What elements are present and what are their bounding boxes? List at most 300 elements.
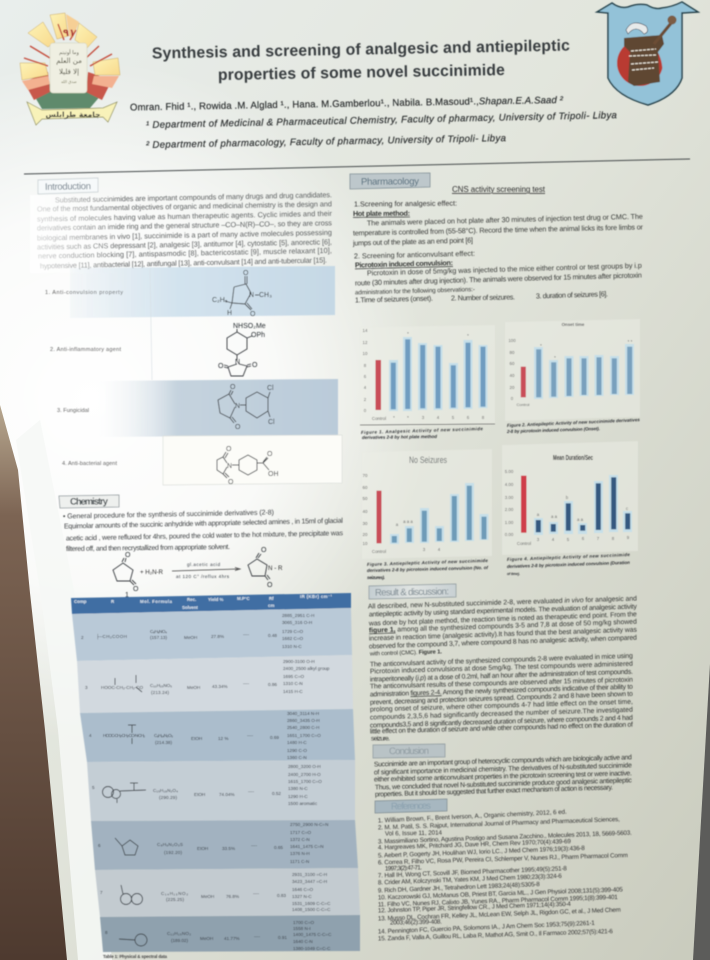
table row: compound 6: 33.5%	[222, 846, 235, 851]
table row: compound 7	[95, 868, 360, 917]
icon: molecule 4	[217, 446, 278, 486]
chart: figure 4 mean seizure duration	[502, 441, 638, 576]
reaction scheme: 1	[125, 592, 129, 599]
chart: figure 2 anti-epileptic onset: 20	[510, 385, 515, 390]
table row: compound 2: 2885_2951 C-H	[282, 613, 314, 618]
table row: compound 5: EtOH	[194, 792, 205, 797]
reaction scheme	[113, 547, 283, 599]
table row: compound 5: 2800_3200 O-H	[288, 764, 321, 769]
table row: compound 4: 2860_3435 O-H	[287, 718, 320, 723]
text: screening methods: temperature is controlled from (55-58°C). Record the time when the animal licks its fore limbs or	[353, 222, 644, 237]
chart: figure 3 number of seizures: a a a	[403, 519, 413, 524]
table header: Rf	[269, 596, 274, 601]
text: reference list: 14. Pennington FC, Guercio PA, Solomons IA., J Am Chem Soc 1953;75(9):2261-1	[378, 920, 595, 935]
chart: figure 4 mean seizure duration: 3	[537, 537, 540, 542]
text: general procedure: • General procedure for the synthesis of succinimide derivatives (2-8)	[63, 509, 274, 520]
icon: molecule 3: Cl	[267, 385, 274, 392]
table row: compound 8: 1400_1475 C-C=C	[293, 932, 332, 937]
text: screening methods: Picrotoxin induced convulsion:	[355, 258, 453, 269]
icon: molecule 1: O	[250, 311, 256, 318]
table row: compound 8	[100, 915, 360, 952]
table row: compound 5: ----	[248, 789, 255, 794]
table header: Solvent	[182, 605, 198, 610]
text: results paragraphs: antiepileptic activity by using standard experimental models. The evaluation of analgesic activity	[369, 604, 638, 618]
text: reference list: 1997;3(2):47-71.	[385, 864, 422, 872]
heading: conclusion	[373, 744, 445, 758]
panel: results and discussion	[368, 584, 638, 742]
text: reference list: 2003;46(2):399-408.	[390, 919, 442, 926]
table row: compound 6: 1376 N-H	[290, 851, 310, 856]
icon: molecule 2: O	[252, 362, 258, 369]
text: screening methods: 2. Screening for anticonvulsant effect:	[354, 249, 475, 260]
chart: figure 2 anti-epileptic onset: 0	[511, 396, 514, 401]
text: results paragraphs: figure 1, among all the synthesized compounds 3-5 and 7,8 at dose of 50 mg/kg showed	[369, 619, 637, 634]
text: results paragraphs: observed for the compound 3,7, where compound 8 has no analgesic activity, when compared	[369, 635, 637, 650]
title: properties of some novel succinimide	[218, 62, 505, 84]
table row: compound 7: 2931_3100 =C-H	[292, 872, 327, 877]
table row: compound 2: ----	[243, 632, 250, 637]
chart: figure 2 anti-epileptic onset: * *	[628, 339, 633, 344]
table row: compound 4: 0.69	[270, 735, 279, 740]
chart: figure 3 number of seizures: 4	[438, 547, 441, 552]
table row: anti-inflammatory agent: 2. Anti-inflammatory agent	[50, 347, 121, 353]
icon: molecule 1: O	[243, 270, 249, 277]
text: results paragraphs: with control (CMC). Figure 1.	[369, 649, 442, 658]
heading: results and discussion	[369, 584, 456, 599]
icon: molecule 4: O	[267, 451, 273, 458]
table header: R	[111, 599, 115, 604]
chart: figure 3 number of seizures: 50	[363, 496, 368, 501]
table row: anti-inflammatory agent	[50, 268, 266, 380]
text: screening methods: administration for the following observations:-	[355, 286, 475, 296]
text: results paragraphs: increase in reaction time (analgesic activity).It has found that the best analgesic activity was	[369, 627, 638, 642]
table row: compound 7: 1531_1609 C-C=C	[292, 901, 331, 906]
caption: figure 4: of time).	[507, 572, 520, 576]
icon: molecule 3: O	[235, 424, 241, 431]
icon: molecule 2: OPh	[251, 332, 265, 339]
table row: compound 3	[77, 655, 353, 713]
chart: figure 4 mean seizure duration: 8	[612, 536, 615, 541]
affiliations: ² Department of pharmacology, Faculty of pharmacy, University of Tripoli- Libya	[146, 133, 506, 151]
chart: figure 2 anti-epileptic onset: Control	[517, 402, 530, 407]
reaction scheme: gl.acetic acid	[187, 562, 220, 567]
heading: chemistry	[59, 495, 119, 508]
chart: figure 3 number of seizures: 60	[363, 485, 368, 490]
table row: compound 3: (213.24)	[151, 690, 169, 695]
text: reference list: 3. Massimiliano Sortino, Agustina Postigo and Susana Zacchino., Molecules 2013, 18, 5669-5603.	[378, 830, 632, 845]
reaction scheme: + H₂N-R	[140, 569, 164, 576]
table row: compound 5: 1380 N-C	[288, 786, 308, 791]
text: reference list: 10. Kaczorowski GJ, McManus OB, Priest BT, Garcia ML., J Gen Physiol 2008;131(5):399-405	[378, 886, 623, 901]
heading: introduction: Introduction	[45, 181, 91, 193]
text: results paragraphs: prevent, decreasing and protection seizures spread. Compounds 2 and 8 have been shown to	[370, 691, 633, 706]
table row: compound 6: 1641_1475 C=N	[290, 844, 324, 849]
chart: figure 3 number of seizures: No Seizures	[409, 455, 447, 466]
chart: figure 4 mean seizure duration: Mean Duration/Sec	[553, 455, 593, 462]
text: introduction paragraph	[37, 190, 333, 270]
icon: molecule 2: N	[235, 359, 240, 366]
chart: figure 4 mean seizure duration: 6	[582, 536, 585, 541]
table row: compound 5: 1500 aromatic	[288, 801, 318, 806]
text: reference list: 12. Johnston TP, Piper JR, Stringfellow CR., J Med Chem 1971;14(4):350-4	[378, 901, 571, 914]
chart: figure 4 mean seizure duration: 9	[627, 535, 630, 540]
text: screening methods: Picrotoxin in dose of 5mg/kg was injected to the mice either control or test groups by i.p	[367, 261, 642, 277]
table header: Comp	[74, 599, 87, 604]
table row: compound 8: 41.77%	[224, 936, 240, 941]
chart: figure 4 mean seizure duration: 4	[552, 537, 555, 542]
caption: figure 1	[361, 426, 483, 440]
chart: figure 1 analgesic activity: *	[393, 415, 395, 420]
caption: figure 3: seizures).	[367, 575, 385, 580]
authors: Omran. Fhid ¹., Rowida .M. Alglad ¹., Hana. M.Gamberlou¹., Nabila. B.Masoud¹.,Shapan.E.A.Saad ²	[130, 95, 564, 113]
table row: compound 6: EtOH	[197, 846, 208, 851]
chart: figure 4 mean seizure duration: 2.00	[505, 507, 514, 512]
table row: compound 5: 5	[92, 785, 95, 790]
icon: molecule 4: OH	[268, 471, 278, 478]
table row: compound 7: 7	[100, 890, 103, 895]
text: results paragraphs	[368, 596, 638, 742]
text: general procedure: filtered off, and then recrystallized from appropriate solvent.	[66, 544, 230, 553]
table row: compound 4: ----	[247, 733, 254, 738]
icon: molecule 4: O	[226, 446, 232, 453]
table row: compound 5: 2400_2700 H-O	[288, 772, 321, 777]
logo: University of Tripoli emblem: صدق الله	[61, 79, 77, 84]
icon: molecule 4: O	[228, 479, 234, 486]
text: results paragraphs: compounds3,5 and 8 significantly decreased duration of seizure, where compounds 2 and 4 had	[370, 715, 633, 729]
text: introduction paragraph: activities such as CNS depressant [2], analgesic [3], antitumor [4], cytostatic [5], anorectic [6],	[37, 237, 332, 251]
caption: figure 2: 2-8 by picrotoxin induced convulsion (Onset).	[506, 426, 600, 434]
logo: University of Tripoli emblem: جامعة طرابلس	[45, 110, 101, 119]
chart: figure 1 analgesic activity: 0	[364, 408, 367, 413]
logo: University of Tripoli emblem: وما أوتيتم	[59, 49, 79, 56]
table row: compound 6: 6	[98, 843, 101, 848]
table row: compound 8: 1380-1049 C=C-C	[293, 946, 331, 951]
text: results paragraphs: compounds 2,3,5,6 had significantly decreased the number of seizure.The investigated	[370, 707, 633, 721]
caption: figure 2	[506, 417, 640, 434]
text: screening methods: 2. Number of seizures.	[451, 292, 515, 302]
table row: compound 4: 4	[89, 733, 92, 738]
table row: compound 2: 2	[81, 635, 84, 640]
table row: compound 2: 0.48	[268, 633, 277, 638]
chart: figure 2 anti-epileptic onset: *	[540, 343, 542, 348]
arrow: reaction	[172, 568, 240, 571]
text: screening methods: route (30 minutes after drug injection). The animals were observed for 15 minutes after picrotoxin	[355, 270, 642, 287]
table row: compound 3: 1415 H-C	[283, 689, 303, 694]
text: screening methods: The animals were placed on hot plate after 30 minutes of injection test drug or CMC. The	[367, 212, 643, 227]
table row: compound 8: C₁₂H₁₅NO₂	[167, 931, 191, 936]
icon: molecule 3: O	[230, 384, 236, 391]
icon: molecule 3	[218, 384, 275, 431]
chart: figure 1 analgesic activity: Control	[372, 416, 386, 421]
table row: compound 3: ----	[243, 681, 250, 686]
reaction scheme: O	[267, 582, 273, 589]
table row: compound 7: C₁₄H₁₃NO₂	[161, 891, 188, 896]
chart: figure 4 mean seizure duration: c	[626, 506, 629, 511]
panel: introduction	[30, 178, 333, 273]
icon: molecule 1: CH₃	[259, 292, 272, 299]
table row: compound 8: 1558 N-I	[293, 926, 311, 931]
chart: figure 3 number of seizures	[362, 449, 492, 580]
caption: figure 2: Figure 2. Antiepileptic Activity of new succinimide derivatives	[507, 417, 640, 428]
chart: figure 1 analgesic activity: 8	[364, 363, 367, 368]
table row: compound 8: MeOH	[200, 936, 213, 941]
text: reference list: 15. Zanda F, Valla A, Guillou RL, Laba R, Mathot AG, Smit O., Il Farmaco 2002;57(5):421-6	[378, 928, 613, 942]
table row: compound 7: (225.25)	[166, 897, 184, 902]
table header: IR (KBr) cm⁻¹	[300, 594, 333, 599]
table header: cm	[268, 603, 274, 608]
chart: figure 4 mean seizure duration: a	[537, 512, 540, 517]
text: introduction paragraph: One of the most fundamental objectives of organic and medicinal chemistry is the design and	[37, 199, 332, 213]
chart: figure 2 anti-epileptic onset: *	[554, 355, 556, 360]
text: reference list: 4. Hargreaves MK, Pritchard JG, Dave HR, Chem Rev 1970;70(4):439-69	[378, 838, 572, 851]
text: results paragraphs: was done by hot plate method, the reaction time is noted as therapeutic end point. From the	[368, 611, 637, 628]
chart: figure 3 number of seizures: 10	[363, 541, 368, 546]
table row: compound 2: (157.13)	[150, 635, 167, 640]
chart: figure 1 analgesic activity: 8	[482, 415, 485, 420]
table row: compound 7: 1646 C=O	[292, 887, 313, 892]
table row: compound 3: 2900-3100 O-H	[283, 659, 315, 664]
text: general procedure	[63, 509, 343, 553]
table row: compound 4	[80, 709, 355, 762]
text: results paragraphs: Picrotoxin induced convulsions at dose 5mg/kg. The test compounds were administered	[370, 661, 633, 675]
table row: compound 3: 43.34%	[212, 684, 228, 689]
chart: figure 3 number of seizures: Control	[372, 549, 386, 554]
chart: figure 2 anti-epileptic onset: 100	[508, 338, 516, 343]
caption: figure 4	[507, 552, 630, 576]
text: results paragraphs: prolong onset of seizure, where other compounds 4-7 had little effect on the onset time,	[370, 699, 633, 713]
heading: pharmacology: Pharmacology	[361, 176, 419, 188]
text: introduction paragraph: hypotensive [11], antibacterial [12], antifungal [13], anti-convulsant [14] and anti-tubercular [15].	[40, 255, 327, 270]
table row: compound 4: 1290 C-O	[287, 748, 307, 753]
icon: molecule 1: H	[227, 310, 232, 317]
chart: figure 3 number of seizures: 20	[363, 532, 368, 537]
heading: results and discussion: Result & discussion:	[375, 586, 449, 599]
chart: figure 4 mean seizure duration: 1.00	[505, 520, 514, 525]
caption: figure 4: Figure 4. Antiepileptic Activity of new succinimide	[507, 552, 630, 562]
table row: compound 4: HOOC-CH₂-CH₂-CO-N-CH₂	[103, 733, 145, 738]
table row: compound 4: 1651_1700 C=O	[287, 733, 321, 738]
panel: pharmacology	[350, 173, 644, 304]
text: general procedure: Equimolar amounts of the succinic anhydride with appropriate selected amines , in 15ml of glacial	[64, 518, 343, 530]
table row: anti-convulsion property: 1. Anti-convulsion property	[45, 290, 123, 296]
icon: molecule 4: N	[227, 463, 232, 470]
table header: Yield %	[208, 597, 224, 602]
chart: figure 4 mean seizure duration: Control	[517, 541, 531, 546]
chart: figure 3 number of seizures: 3	[423, 547, 426, 552]
icon: molecule 1: C₂H₅	[212, 297, 228, 304]
table row: compound 6: ----	[251, 843, 258, 848]
reaction scheme: at 120 C° /reflux 4hrs	[176, 574, 230, 579]
text: reference list	[378, 809, 632, 942]
chart: figure 4 mean seizure duration: 7	[597, 536, 600, 541]
chart: figure 4 mean seizure duration: 5	[567, 537, 570, 542]
text: results paragraphs: administration figures 2-4. Among the newly synthesized compounds indicative of their ability to	[370, 684, 633, 698]
chart: figure 2 anti-epileptic onset: Onset time	[562, 322, 585, 327]
table row: compound 8: ----	[254, 934, 261, 939]
icon: molecule 2: O	[218, 363, 224, 370]
chart: figure 2 anti-epileptic onset: 60	[510, 361, 515, 366]
table row: compound 6: C₈H₉N₂O₃S	[157, 842, 183, 847]
table row: compound 2: ├–CH₂COOH	[96, 633, 127, 640]
heading: pharmacology	[350, 173, 430, 189]
table row: compound 6: (192.20)	[164, 850, 182, 855]
table row: compound 5: 1615_1700 C=O	[288, 779, 322, 784]
heading: introduction	[38, 178, 98, 194]
reaction scheme: O	[133, 586, 139, 593]
table row: compound 6: 1372 C-N	[290, 837, 310, 842]
text: reference list: 8. Crider AM, Kolczynski TM, Yates KM, J Med Chem 1980;23(3):324-6	[378, 873, 562, 886]
panel: conclusion	[373, 744, 633, 798]
heading: CNS activity screening test: CNS activity screening test	[452, 185, 546, 194]
heading: references	[375, 799, 447, 813]
chart: figure 3 number of seizures: 70	[363, 473, 368, 478]
caption: figure 4: derivatives 2-8 by picrotoxin induced convulsion (Duration	[507, 560, 630, 569]
table row: compound 3: 2400_2500 alkyl group	[283, 666, 330, 671]
caption: figure 1: derivatives 2-8 by hot plate method	[362, 434, 437, 440]
text: results paragraphs: All described, new N-substituted succinimide 2-8, were evaluated in vivo for analgesic and	[368, 596, 637, 610]
table row: compound 2: 1682 C=O	[282, 636, 303, 641]
table row: compound 6: 2750_2900 N-C=N	[290, 822, 328, 827]
caption: figure 3: Figure 3. Antiepileptic Activity of new succinimide	[367, 558, 488, 567]
chart: figure 1 analgesic activity: *	[407, 331, 409, 336]
text: results paragraphs: little effect on the duration of seizure and while other compounds had no effect on the duration of	[370, 722, 633, 735]
table header	[71, 593, 351, 614]
text: introduction paragraph: derivatives contain an imide ring and the general structure –CO–N(R)–CO–, so they are cross	[37, 218, 332, 232]
chart: figure 2 anti-epileptic onset: 40	[510, 373, 515, 378]
heading: conclusion: Conclusion	[389, 746, 429, 757]
text: screening methods: Hot plate method:	[353, 209, 410, 218]
table row: compound 7: MeOH	[201, 894, 214, 899]
table row: compound 2: 3065_316 O-H	[282, 620, 312, 625]
table row: compound 2: C₆H₉NO₄	[150, 629, 167, 634]
table row: compound 6: 1717 C=O	[290, 830, 311, 835]
text: conclusion paragraph	[374, 754, 633, 798]
icon: molecule 1: N	[249, 292, 254, 299]
table row: compound 8: 8	[105, 930, 108, 935]
text: reference list: 1. William Brown, F., Brent Iverson, A., Organic chemistry, 2012, 6 ed.	[378, 809, 567, 824]
affiliations: ¹ Department of Medicinal & Pharmaceutical Chemistry, Faculty of pharmacy, University of Tripoli- Libya	[146, 110, 617, 131]
table row: anti-bacterial agent: 4. Anti-bacterial agent	[62, 461, 117, 467]
table row: compound 8: 1640 C-N	[293, 939, 313, 944]
reaction scheme: O	[125, 552, 131, 559]
text: introduction paragraph: nerve conduction blocking [7], antispasmodic [8], bactericostatic [9], muscle relaxant [10],	[38, 246, 332, 260]
chart: figure 1 analgesic activity: *	[407, 415, 409, 420]
text: results paragraphs: The anticonvulsant activity of the synthesized compounds 2-8 were evaluated in mice using	[370, 653, 633, 668]
chart: figure 3 number of seizures: 30	[363, 521, 368, 526]
table row: compound 3: 1695 C=O	[283, 674, 304, 679]
table row: compound 5: 0.52	[272, 791, 281, 796]
caption: figure 3	[367, 558, 488, 580]
text: reference list: Vol 6, Issue 11, 2014	[385, 829, 443, 837]
caption: figure 1: Figure 1. Analgesic Activity of new succinimide	[361, 426, 483, 435]
icon: molecule 3: N	[235, 403, 240, 410]
chart: figure 3 number of seizures: 40	[363, 509, 368, 514]
table row: compound 6: 1171 C-N	[290, 859, 309, 864]
table row: compound 3: 3	[85, 685, 88, 690]
reaction scheme: O	[261, 547, 267, 554]
title	[152, 37, 570, 84]
icon: molecule 2: NHSO₂Me	[233, 323, 266, 330]
text: screening methods: 1.Screening for analgesic effect:	[354, 199, 457, 208]
table row: compound 7: 1327 N-C	[292, 894, 312, 899]
table row: compound 5: 1290 H-C	[288, 794, 308, 799]
table row: fungicidal: 3. Fungicidal	[57, 408, 89, 414]
reaction scheme: N - R	[268, 565, 283, 572]
table header: M.P°C	[237, 596, 251, 601]
table: compound properties	[71, 593, 360, 959]
table note: Table 1: Physical & spectral data	[103, 954, 168, 959]
table row: compound 4: 2540_2800 C-H	[287, 725, 319, 730]
table row: compound 3: HOOC-CH₂-CH₂-CO	[101, 685, 144, 690]
heading: chemistry: Chemistry	[70, 496, 109, 508]
chart: figure 1 analgesic activity: 14	[363, 328, 368, 333]
text: screening methods: 3. duration of seizures [6].	[536, 289, 608, 300]
table row: compound 7: 76.8%	[226, 894, 239, 899]
table row: compound 5	[87, 760, 355, 821]
table row: compound 7: 1408_1500 C-C=C	[292, 907, 331, 912]
text: conclusion paragraph: either exhibited some anticonvulsant properties in the picrotoxin screening test or were inactive.	[374, 770, 632, 783]
chart: figure 1 analgesic activity	[360, 325, 495, 440]
text: conclusion paragraph: of significant importance in medicinal chemistry. The derivatives of N-substituted succinimide	[374, 762, 632, 776]
table row: compound 8: (189.02)	[171, 938, 188, 943]
table row: anti-bacterial agent	[62, 435, 342, 486]
text: results paragraphs: seizure.	[371, 736, 390, 742]
table row: compound 4: C₉H₁₄N₂O₃	[154, 733, 173, 738]
chart: figure 4 mean seizure duration: 0.00	[505, 532, 514, 537]
chart: figure 1 analgesic activity: 6	[364, 374, 367, 379]
chart: figure 1 analgesic activity: 6	[467, 415, 470, 420]
panel: references	[375, 799, 632, 942]
logo: University of Tripoli emblem: ٩١	[63, 28, 75, 39]
text: introduction paragraph: Substituted succinimides are important compounds of many drugs and drug candidates.	[55, 190, 332, 204]
affiliations	[146, 110, 617, 151]
chart: figure 4 mean seizure duration: b	[566, 495, 569, 500]
text: general procedure: acetic acid , were refluxed for 4hrs, poured the cold water to the hot mixture, the precipitate was	[66, 530, 343, 542]
table row: compound 8: 0.91	[278, 935, 287, 940]
chart: figure 2 anti-epileptic onset: 80	[510, 350, 515, 355]
text: screening methods: jumps out of the plate as an end point [6]	[352, 236, 473, 248]
chart: figure 2 anti-epileptic onset	[505, 319, 640, 434]
caption: figure 3: derivatives 2-8 by picrotoxin induced convulsion (No. of	[367, 565, 488, 573]
table row: compound 4: EtOH	[191, 736, 202, 741]
chart: figure 4 mean seizure duration: 3.00	[505, 495, 514, 500]
icon: molecule 2	[218, 323, 266, 376]
chart: figure 1 analgesic activity: 12	[363, 340, 368, 345]
table row: compound 4: (214.38)	[155, 740, 172, 745]
chart: figure 1 analgesic activity: 4	[437, 415, 440, 420]
icon: molecule 3: Cl	[268, 419, 275, 426]
chart: figure 1 analgesic activity: *	[467, 333, 469, 338]
table row: compound 4: 1480 H-C	[287, 740, 307, 745]
text: reference list: 11. Filho VC, Nunes RJ, Calixto JB, Yunes RA., Pharm Pharmacol Comm 1995;1(8):399-401	[378, 894, 618, 908]
text: introduction paragraph: synthesis of molecules having value as human therapeutic agents. Cyclic imides and their	[37, 209, 333, 223]
logo: University of Tripoli emblem: إلا قليلا	[59, 68, 79, 76]
table row: compound 2	[72, 608, 352, 661]
table row: compound 8: 1700 C=O	[293, 920, 314, 925]
chart: figure 4 mean seizure duration: 5.00	[505, 469, 514, 474]
chart: figure 4 mean seizure duration: 4.00	[505, 482, 514, 487]
text: reference list: 2. M. M. Patil, S. S. Rajput, International Journal of Pharmacy and Pharmaceutical Sciences,	[378, 816, 620, 831]
table row: anti-convulsion property	[45, 266, 335, 318]
chart: figure 1 analgesic activity: 2	[364, 397, 367, 402]
chart: figure 1 analgesic activity: 10	[363, 351, 368, 356]
table row: compound 2: MeOH	[184, 635, 197, 640]
table row: compound 7: 3423_3447 =C-H	[292, 879, 327, 884]
table row: compound 2: 1729 C=O	[282, 629, 303, 634]
table row: compound 6: 0.65	[274, 845, 283, 850]
table header: Rec.	[187, 597, 196, 602]
text: screening methods: 1.Time of seizures (onset).	[355, 294, 433, 304]
